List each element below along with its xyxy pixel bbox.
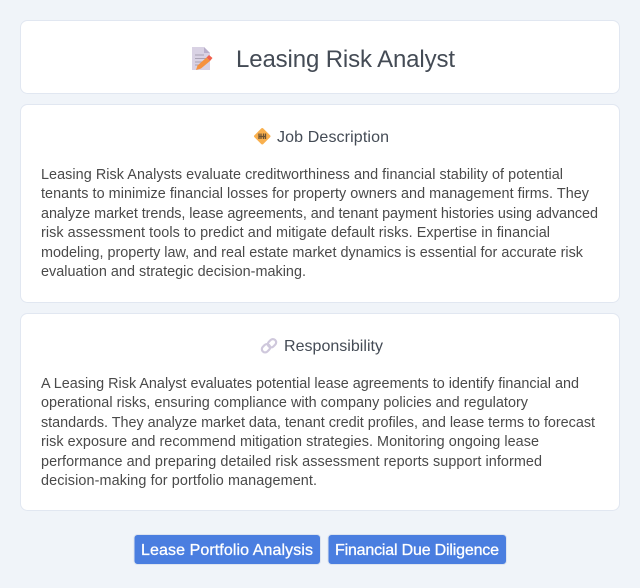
- text block: responsibility: decision-making for portfolio management.: [41, 473, 317, 489]
- title: Leasing Risk Analyst: [236, 46, 455, 73]
- panel: job description: [20, 104, 620, 302]
- text block: job description: tenants to minimize financial losses for property owners and management firms. They: [41, 186, 590, 202]
- text block: job description: analyze market trends, lease agreements, and tenant payment histories using advanced: [41, 206, 598, 222]
- text block: responsibility: [41, 376, 595, 489]
- text block: job description: evaluation and strategic decision-making.: [41, 264, 306, 280]
- icon: chain link: [261, 338, 277, 354]
- text block: responsibility: operational risks, ensuring compliance with company policies and regulatory: [41, 395, 529, 411]
- text block: responsibility: standards. They analyze market data, tenant credit profiles, and lease terms to forecast: [41, 415, 595, 431]
- text block: responsibility: A Leasing Risk Analyst evaluates potential lease agreements to identify financial and: [41, 376, 579, 392]
- text block: responsibility: risk exposure and recommend mitigation strategies. Monitoring ongoing lease: [41, 434, 539, 450]
- text block: job description: risk assessment tools to predict and mitigate default risks. Expertise in financial: [41, 225, 550, 241]
- text block: job description: Leasing Risk Analysts evaluate creditworthiness and financial stability of potential: [41, 167, 563, 183]
- icon: orange diamond: [253, 127, 271, 145]
- icon: document with pencil: [192, 47, 212, 70]
- tag: lease portfolio analysis: [134, 534, 320, 564]
- heading: job description: Job Description: [277, 129, 389, 146]
- text block: job description: [41, 167, 598, 280]
- panel: responsibility: [20, 314, 620, 510]
- tag: financial due diligence: Financial Due Diligence: [335, 542, 499, 559]
- heading: responsibility: Responsibility: [284, 338, 383, 355]
- text block: responsibility: performance and preparing detailed risk assessment reports support informed: [41, 454, 542, 470]
- tag: financial due diligence: [328, 534, 506, 564]
- text block: job description: modeling, property law, and real estate market dynamics is essential for accurate risk: [41, 245, 584, 261]
- panel: header: [20, 20, 620, 94]
- tag: lease portfolio analysis: Lease Portfolio Analysis: [141, 542, 313, 559]
